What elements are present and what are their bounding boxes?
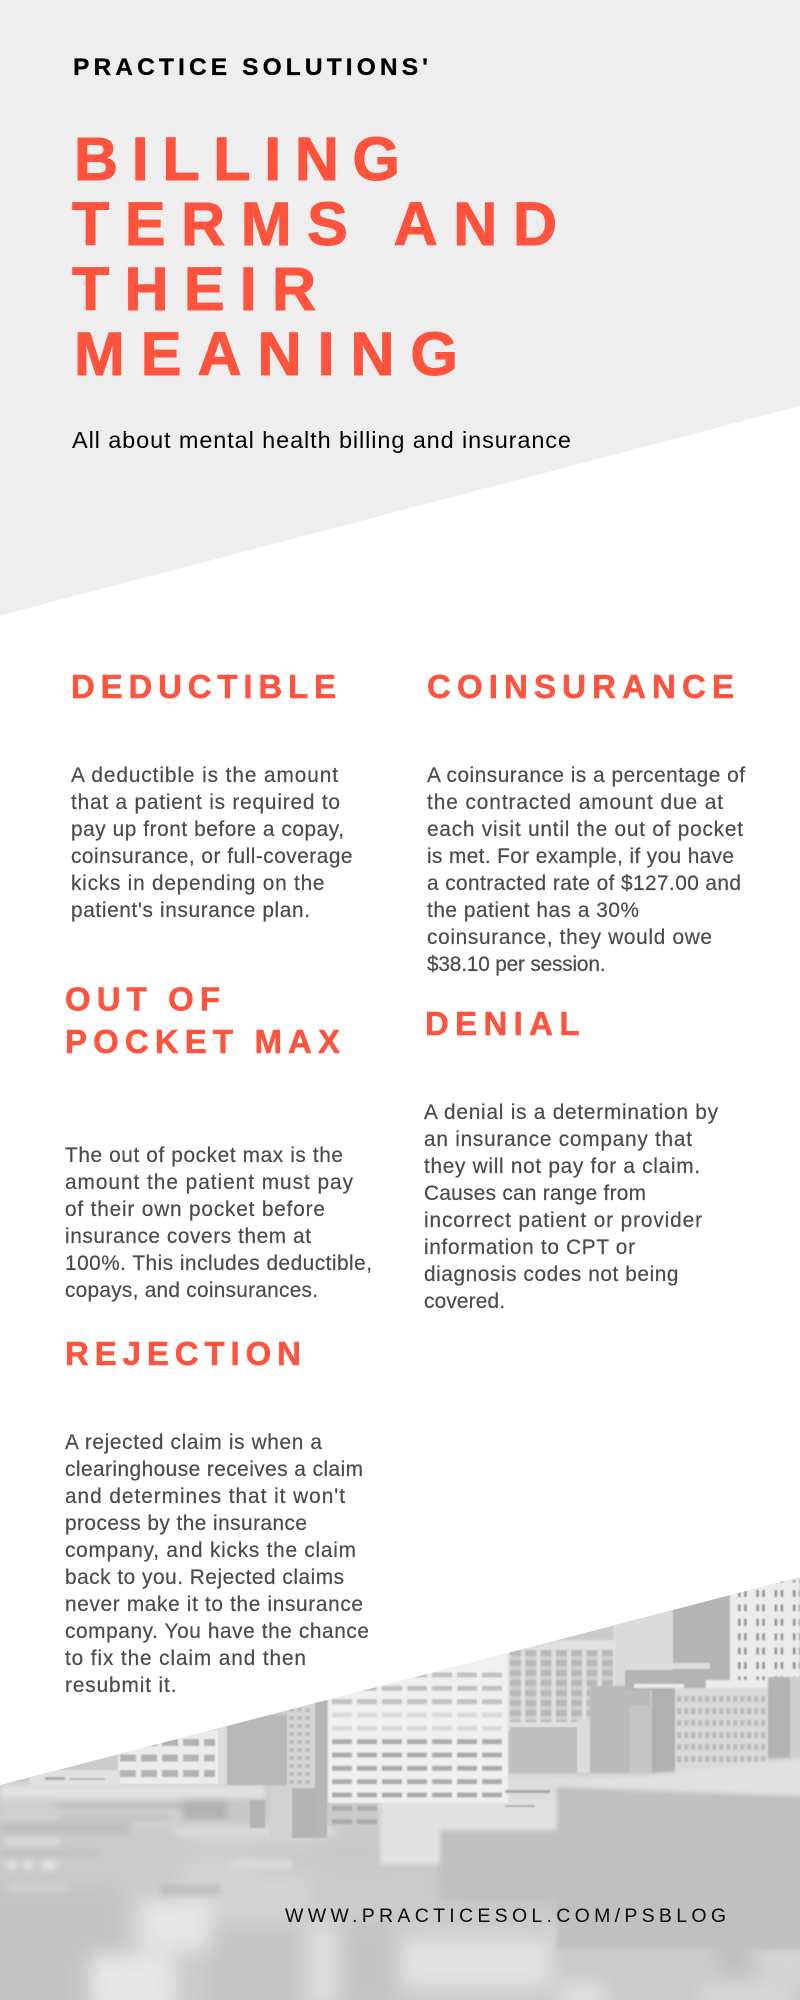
body: denial (424, 1101, 719, 1313)
body: rejection: company, and kicks the claim (65, 1539, 356, 1562)
title: TERMS AND (72, 190, 557, 258)
body: coinsurance (427, 764, 745, 976)
title: MEANING (74, 320, 458, 388)
body: rejection: and determines that it won't (65, 1485, 345, 1508)
body: out of pocket max: 100%. This includes deductible, (65, 1252, 372, 1275)
body: deductible: that a patient is required to (71, 791, 340, 814)
heading: coinsurance: COINSURANCE (427, 668, 734, 705)
body: rejection: never make it to the insurance (65, 1593, 363, 1616)
body: denial: covered. (424, 1290, 505, 1313)
body: denial: incorrect patient or provider (424, 1209, 702, 1232)
body: denial: Causes can range from (424, 1182, 646, 1205)
body: rejection: company. You have the chance (65, 1620, 369, 1643)
heading: denial: DENIAL (425, 1005, 580, 1042)
heading: rejection: REJECTION (65, 1335, 301, 1372)
sky patch (613, 1610, 673, 1685)
heading: out of pocket max: OUT OF (65, 980, 220, 1018)
subtitle: All about mental health billing and insurance (72, 427, 571, 453)
body: out of pocket max: insurance covers them at (65, 1225, 311, 1248)
body: rejection: resubmit it. (65, 1674, 176, 1697)
body: rejection: process by the insurance (65, 1512, 307, 1535)
dark tower (673, 1595, 730, 1680)
low building with window grid (675, 1688, 768, 1773)
kicker: Practice Solutions': PRACTICE SOLUTIONS' (73, 54, 428, 81)
body: coinsurance: the patient has a 30% (427, 899, 639, 922)
body: out of pocket max: copays, and coinsurances. (65, 1279, 318, 1302)
body: denial: diagnosis codes not being (424, 1263, 678, 1286)
body: denial: information to CPT or (424, 1236, 635, 1259)
body: coinsurance: the contracted amount due at (427, 791, 723, 814)
header background panel (0, 0, 800, 616)
heading: out of pocket max: POCKET MAX (65, 1023, 340, 1060)
body: denial: they will not pay for a claim. (424, 1155, 700, 1178)
title (72, 125, 557, 388)
mid building with bays (508, 1640, 616, 1730)
body: deductible: coinsurance, or full-coverage (71, 845, 352, 868)
sharp buildings right of centre (508, 1570, 800, 1773)
footer url: WWW.PRACTICESOL.COM/PSBLOG (285, 1905, 726, 1927)
body: coinsurance: is met. For example, if you have (427, 845, 734, 868)
body: coinsurance: each visit until the out of pocket (427, 818, 743, 841)
body: deductible (71, 764, 352, 922)
section: deductible (71, 668, 352, 922)
body: out of pocket max: amount the patient must pay (65, 1171, 354, 1194)
heading: deductible: DEDUCTIBLE (71, 668, 336, 705)
body: rejection: clearinghouse receives a claim (65, 1458, 363, 1481)
soft roof and dark facade (380, 1756, 800, 1950)
body: out of pocket max (65, 1144, 372, 1302)
body: rejection: A rejected claim is when a (65, 1431, 322, 1454)
section: coinsurance (427, 668, 745, 976)
body: deductible: patient's insurance plan. (71, 899, 310, 922)
body: coinsurance: coinsurance, they would owe (427, 926, 712, 949)
body: denial: an insurance company that (424, 1128, 692, 1151)
body: rejection: back to you. Rejected claims (65, 1566, 344, 1589)
body: deductible: pay up front before a copay, (71, 818, 344, 841)
city skyline photo panel (0, 1570, 800, 2000)
body: denial: A denial is a determination by (424, 1101, 719, 1124)
dark lower block (510, 1726, 578, 1772)
blurred foreground of the city (0, 1872, 800, 2000)
section: rejection (65, 1335, 369, 1697)
body: deductible: kicks in depending on the (71, 872, 324, 895)
body: rejection: to fix the claim and then (65, 1647, 306, 1670)
large pale office and left buildings (30, 1640, 550, 1838)
soft mid-ground of the city (0, 1785, 335, 1895)
body: deductible: A deductible is the amount (71, 764, 338, 787)
body: out of pocket max: The out of pocket max is the (65, 1144, 343, 1167)
title: THEIR (72, 255, 316, 323)
body: coinsurance: A coinsurance is a percentage of (427, 764, 745, 787)
section: out of pocket max (65, 980, 372, 1302)
section: denial (424, 1005, 719, 1313)
body: rejection (65, 1431, 369, 1697)
body: coinsurance: a contracted rate of $127.00 and (427, 872, 741, 895)
pale tower with windows (730, 1570, 800, 1682)
body: out of pocket max: of their own pocket before (65, 1198, 325, 1221)
title: BILLING (74, 125, 400, 193)
body: coinsurance: $38.10 per session. (427, 953, 606, 976)
heading: out of pocket max (65, 980, 340, 1060)
